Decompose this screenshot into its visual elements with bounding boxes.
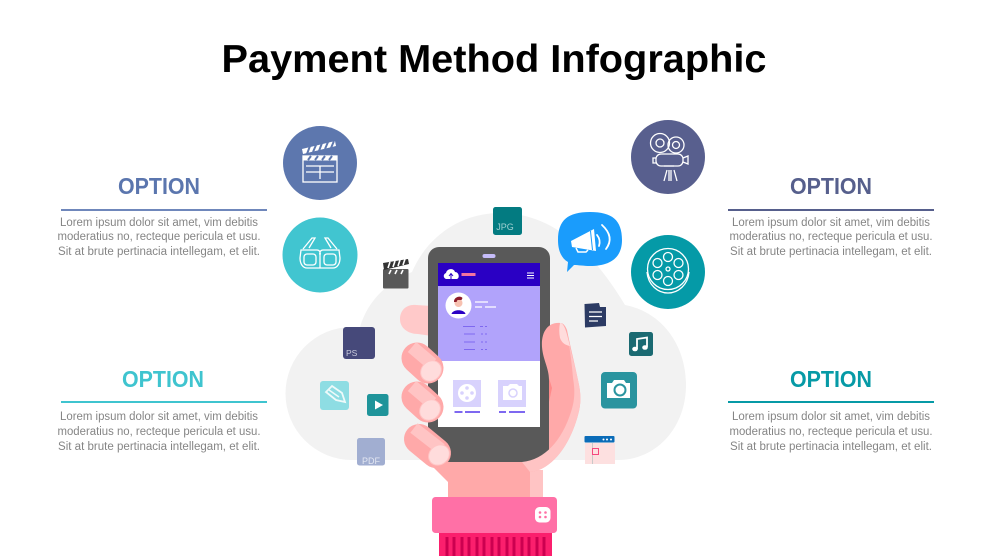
icon: music note — [629, 332, 653, 356]
panel: option top right: Sit at brute pertinacia intellegam, et elit. — [730, 246, 932, 258]
finger four — [419, 439, 436, 453]
icon: PDF file: PDF — [362, 456, 381, 466]
panel: option top right: OPTION — [790, 173, 872, 199]
icon: clapperboard circle — [283, 126, 357, 200]
icon: megaphone speech bubble — [558, 212, 622, 272]
arm and upper finger — [400, 305, 543, 500]
panel: option bottom right: OPTION — [790, 366, 872, 392]
panel: option top left: moderatius no, recteque pericula et usu. — [58, 231, 260, 243]
icon: PS file — [343, 327, 375, 359]
panel: option bottom right: Sit at brute pertinacia intellegam, et elit. — [730, 441, 932, 453]
background cloud — [286, 213, 686, 460]
icon: JPG file: JPG — [496, 222, 514, 232]
panel: option bottom left — [58, 366, 267, 453]
icon: 3D glasses circle — [282, 218, 358, 292]
phone — [428, 247, 550, 462]
finger two — [417, 358, 428, 368]
panel: option top left: Lorem ipsum dolor sit amet, vim debitis — [60, 217, 258, 229]
panel: option top left: Sit at brute pertinacia intellegam, et elit. — [58, 246, 260, 258]
icon: browser window — [584, 436, 615, 464]
panel: option bottom left: Lorem ipsum dolor sit amet, vim debitis — [60, 411, 258, 423]
finger three — [417, 397, 428, 407]
avatar — [446, 292, 472, 318]
icon: movie camera circle — [631, 120, 705, 194]
icon: camera — [601, 372, 637, 408]
panel: option top right — [728, 173, 934, 258]
panel: option bottom right: Lorem ipsum dolor sit amet, vim debitis — [732, 411, 930, 423]
icon: PDF file — [357, 438, 385, 466]
panel: option bottom right: moderatius no, recteque pericula et usu. — [730, 426, 932, 438]
cloud logo — [444, 269, 459, 279]
panel: option top left: OPTION — [118, 173, 200, 199]
thumbnail: film — [453, 380, 481, 407]
panel: option top left — [58, 173, 267, 258]
icon: play button — [367, 394, 388, 416]
caption bars — [454, 411, 525, 413]
profile lines — [475, 302, 496, 307]
title: Payment Method Infographic — [222, 38, 766, 81]
icon: film reel circle — [631, 235, 705, 309]
icon: PS file: PS — [346, 348, 358, 358]
panel: option top right: moderatius no, recteque pericula et usu. — [730, 231, 932, 243]
icon: JPG file — [493, 207, 522, 235]
panel: option top right: Lorem ipsum dolor sit amet, vim debitis — [732, 217, 930, 229]
panel: option bottom right — [728, 366, 934, 453]
thumb and palm wrapping the phone — [428, 323, 580, 500]
panel: option bottom left: moderatius no, recteque pericula et usu. — [58, 426, 260, 438]
icon: edit pencil — [320, 381, 349, 410]
icon: document — [584, 303, 606, 328]
panel: option bottom left: OPTION — [122, 366, 204, 392]
sleeve cuff — [432, 497, 557, 556]
fingers — [412, 347, 454, 469]
screen — [438, 263, 540, 427]
icon: small clapperboard — [383, 259, 409, 288]
thumbnail: camera — [498, 380, 526, 407]
panel: option bottom left: Sit at brute pertinacia intellegam, et elit. — [58, 441, 260, 453]
